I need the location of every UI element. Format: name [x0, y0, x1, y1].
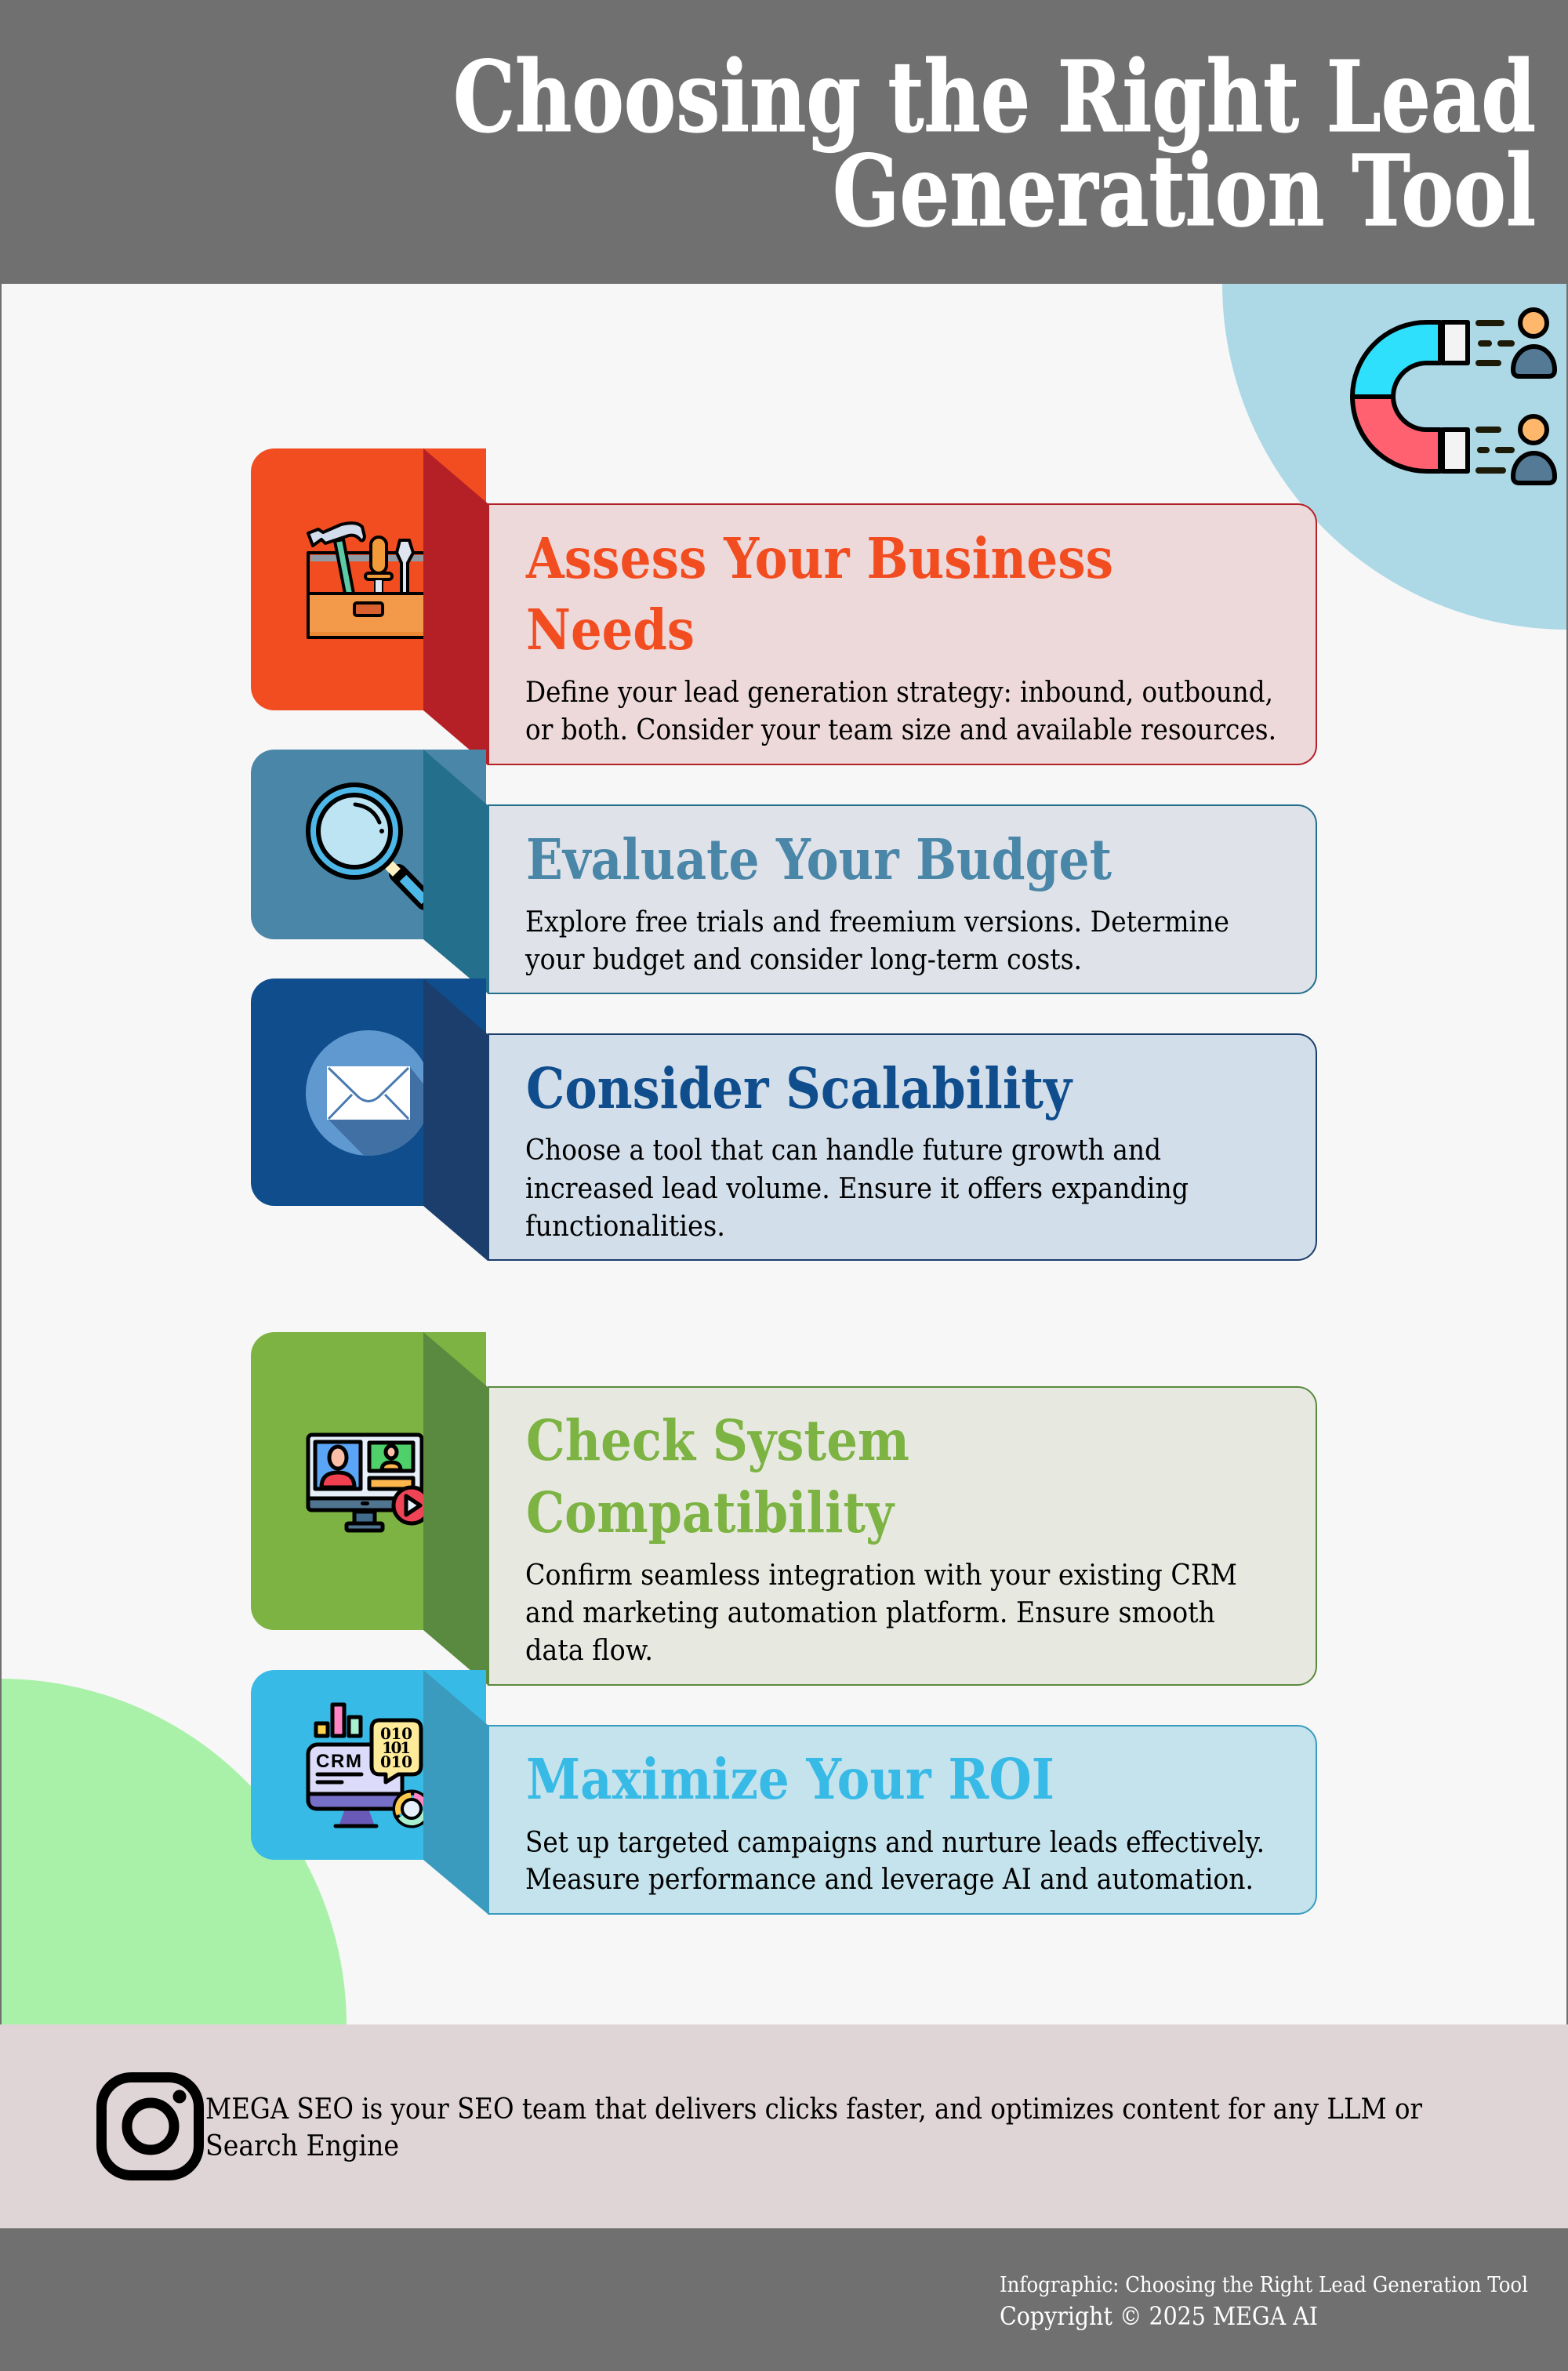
icon tile: roi	[251, 1670, 486, 1860]
body text: scalability: increased lead volume. Ensure it offers expanding	[525, 1173, 1189, 1205]
body text: roi	[525, 1827, 1265, 1896]
heading: budget: Evaluate Your Budget	[526, 826, 1112, 892]
body text: scalability: Choose a tool that can handle future growth and	[525, 1135, 1161, 1167]
panel: consider scalability	[251, 979, 1316, 1261]
decorative quarter circle: top right	[1222, 284, 1566, 630]
decorative quarter circle: bottom left	[2, 1679, 347, 2024]
promo band	[0, 2024, 1568, 2228]
icon: CRM dashboard: 101	[382, 1738, 411, 1757]
icon: envelope	[306, 1030, 423, 1156]
icon: CRM dashboard: 010	[380, 1752, 412, 1771]
footer band	[0, 2228, 1568, 2371]
body text: assess: or both. Consider your team size and available resources.	[525, 714, 1276, 746]
icon tile: scalability	[251, 979, 486, 1206]
heading: scalability: Consider Scalability	[526, 1055, 1073, 1121]
body text: compatibility: data flow.	[525, 1635, 653, 1667]
heading: assess: Assess Your Business	[525, 525, 1113, 591]
panel: maximize your roi	[251, 1670, 1316, 1914]
card: scalability	[488, 1034, 1316, 1260]
footer credits: Copyright © 2025 MEGA AI	[1000, 2301, 1318, 2331]
heading: compatibility: Check System	[526, 1407, 909, 1473]
fold: roi	[423, 1670, 488, 1914]
footer credits	[1000, 2273, 1528, 2331]
panel: assess your business needs	[251, 448, 1316, 765]
fold: assess	[423, 448, 488, 765]
body text: budget: Explore free trials and freemium versions. Determine	[525, 906, 1229, 939]
body text: budget	[524, 906, 1229, 976]
card: compatibility	[488, 1387, 1316, 1685]
body text: assess	[525, 677, 1276, 746]
icon: video monitor	[308, 1435, 430, 1530]
icon: CRM dashboard: 010	[380, 1724, 412, 1743]
panel: evaluate your budget	[251, 750, 1316, 993]
icon tile: assess	[251, 448, 486, 710]
body text: scalability	[525, 1135, 1189, 1243]
heading: compatibility: Compatibility	[526, 1480, 895, 1545]
card: roi	[488, 1726, 1316, 1914]
icon: magnet attracting leads	[1352, 310, 1555, 483]
panel: check system compatibility	[251, 1332, 1316, 1685]
title	[453, 40, 1536, 249]
fold: budget	[423, 750, 488, 993]
icon: CRM dashboard: CRM	[316, 1751, 361, 1772]
heading: roi: Maximize Your ROI	[526, 1746, 1054, 1812]
fold: compatibility	[423, 1332, 488, 1685]
body text: compatibility: and marketing automation platform. Ensure smooth	[525, 1597, 1215, 1629]
body text: compatibility	[525, 1559, 1237, 1667]
promo text: Search Engine	[205, 2130, 399, 2162]
icon tile: compatibility	[251, 1332, 486, 1630]
icon: CRM dashboard	[308, 1705, 429, 1826]
icon: toolbox	[308, 523, 428, 637]
fold: scalability	[423, 979, 488, 1261]
heading: compatibility	[526, 1407, 909, 1545]
page background	[0, 284, 1568, 2024]
promo text	[205, 2093, 1423, 2162]
header band	[0, 0, 1568, 284]
body text: roi: Measure performance and leverage AI and automation.	[525, 1864, 1254, 1896]
heading: assess: Needs	[526, 597, 695, 663]
page side borders	[1, 284, 1567, 2024]
icon tile: budget	[251, 750, 486, 939]
body text: compatibility: Confirm seamless integration with your existing CRM	[525, 1559, 1237, 1592]
body text: budget: your budget and consider long-term costs.	[524, 944, 1082, 976]
promo text: MEGA SEO is your SEO team that delivers clicks faster, and optimizes content for any LLM or	[205, 2093, 1423, 2126]
card: assess	[488, 504, 1316, 764]
body text: roi: Set up targeted campaigns and nurture leads effectively.	[525, 1827, 1265, 1859]
footer credits: Infographic: Choosing the Right Lead Generation Tool	[1000, 2273, 1528, 2297]
heading: assess	[525, 525, 1113, 663]
card: budget	[488, 805, 1316, 993]
body text: assess: Define your lead generation strategy: inbound, outbound,	[525, 677, 1273, 709]
icon: magnifying glass	[308, 785, 425, 901]
body text: scalability: functionalities.	[525, 1211, 725, 1243]
icon: instagram logo	[102, 2078, 199, 2175]
